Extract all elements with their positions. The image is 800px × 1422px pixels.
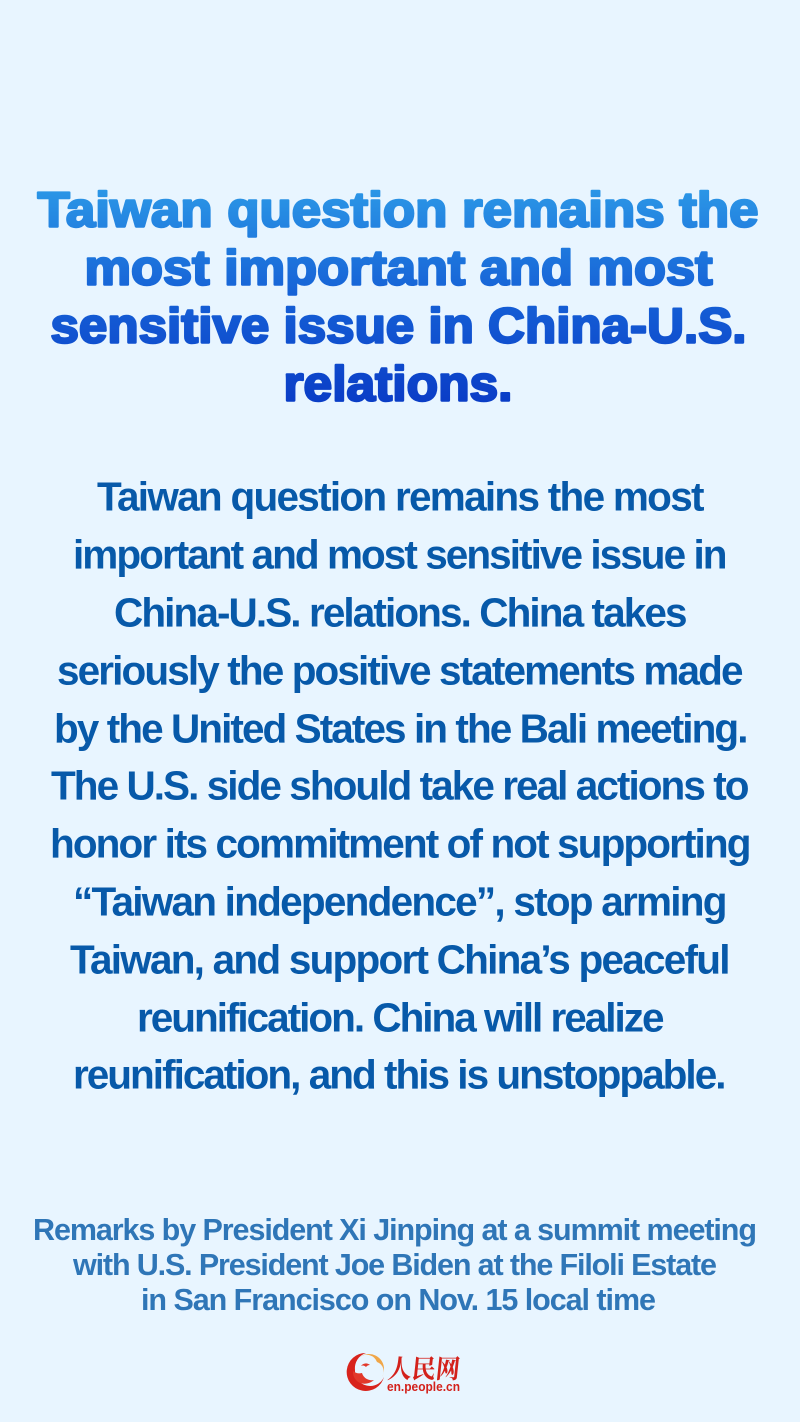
body text block: reunification. China will realize (137, 994, 664, 1040)
body text block: honor its commitment of not supporting (50, 820, 752, 866)
body text block (50, 474, 752, 1098)
source attribution: in San Francisco on Nov. 15 local time (141, 1283, 656, 1317)
body text block: important and most sensitive issue in (73, 532, 728, 578)
body text block: by the United States in the Bali meeting. (54, 706, 748, 752)
source attribution: with U.S. President Joe Biden at the Filoli Estate (72, 1248, 717, 1282)
title: sensitive issue in China-U.S. (50, 300, 746, 354)
title: most important and most (84, 242, 712, 296)
source attribution: Remarks by President Xi Jinping at a summit meeting (33, 1213, 757, 1247)
logo wordmark: 人民网 (386, 1349, 462, 1386)
icon: logo swirl (347, 1353, 384, 1391)
source attribution (33, 1213, 757, 1317)
body text block: The U.S. side should take real actions to (51, 762, 750, 808)
body text block: China-U.S. relations. China takes (114, 590, 688, 636)
body text block: reunification, and this is unstoppable. (73, 1052, 726, 1098)
body text block: Taiwan question remains the most (97, 474, 704, 520)
body text block: “Taiwan independence”, stop arming (73, 878, 728, 924)
title: relations. (284, 358, 512, 412)
body text block: Taiwan, and support China’s peaceful (70, 936, 730, 982)
title: Taiwan question remains the (38, 184, 758, 238)
logo url: en.people.cn (387, 1380, 460, 1394)
title (38, 184, 758, 412)
body text block: seriously the positive statements made (57, 648, 744, 694)
logo: People's Daily Online (347, 1349, 462, 1394)
